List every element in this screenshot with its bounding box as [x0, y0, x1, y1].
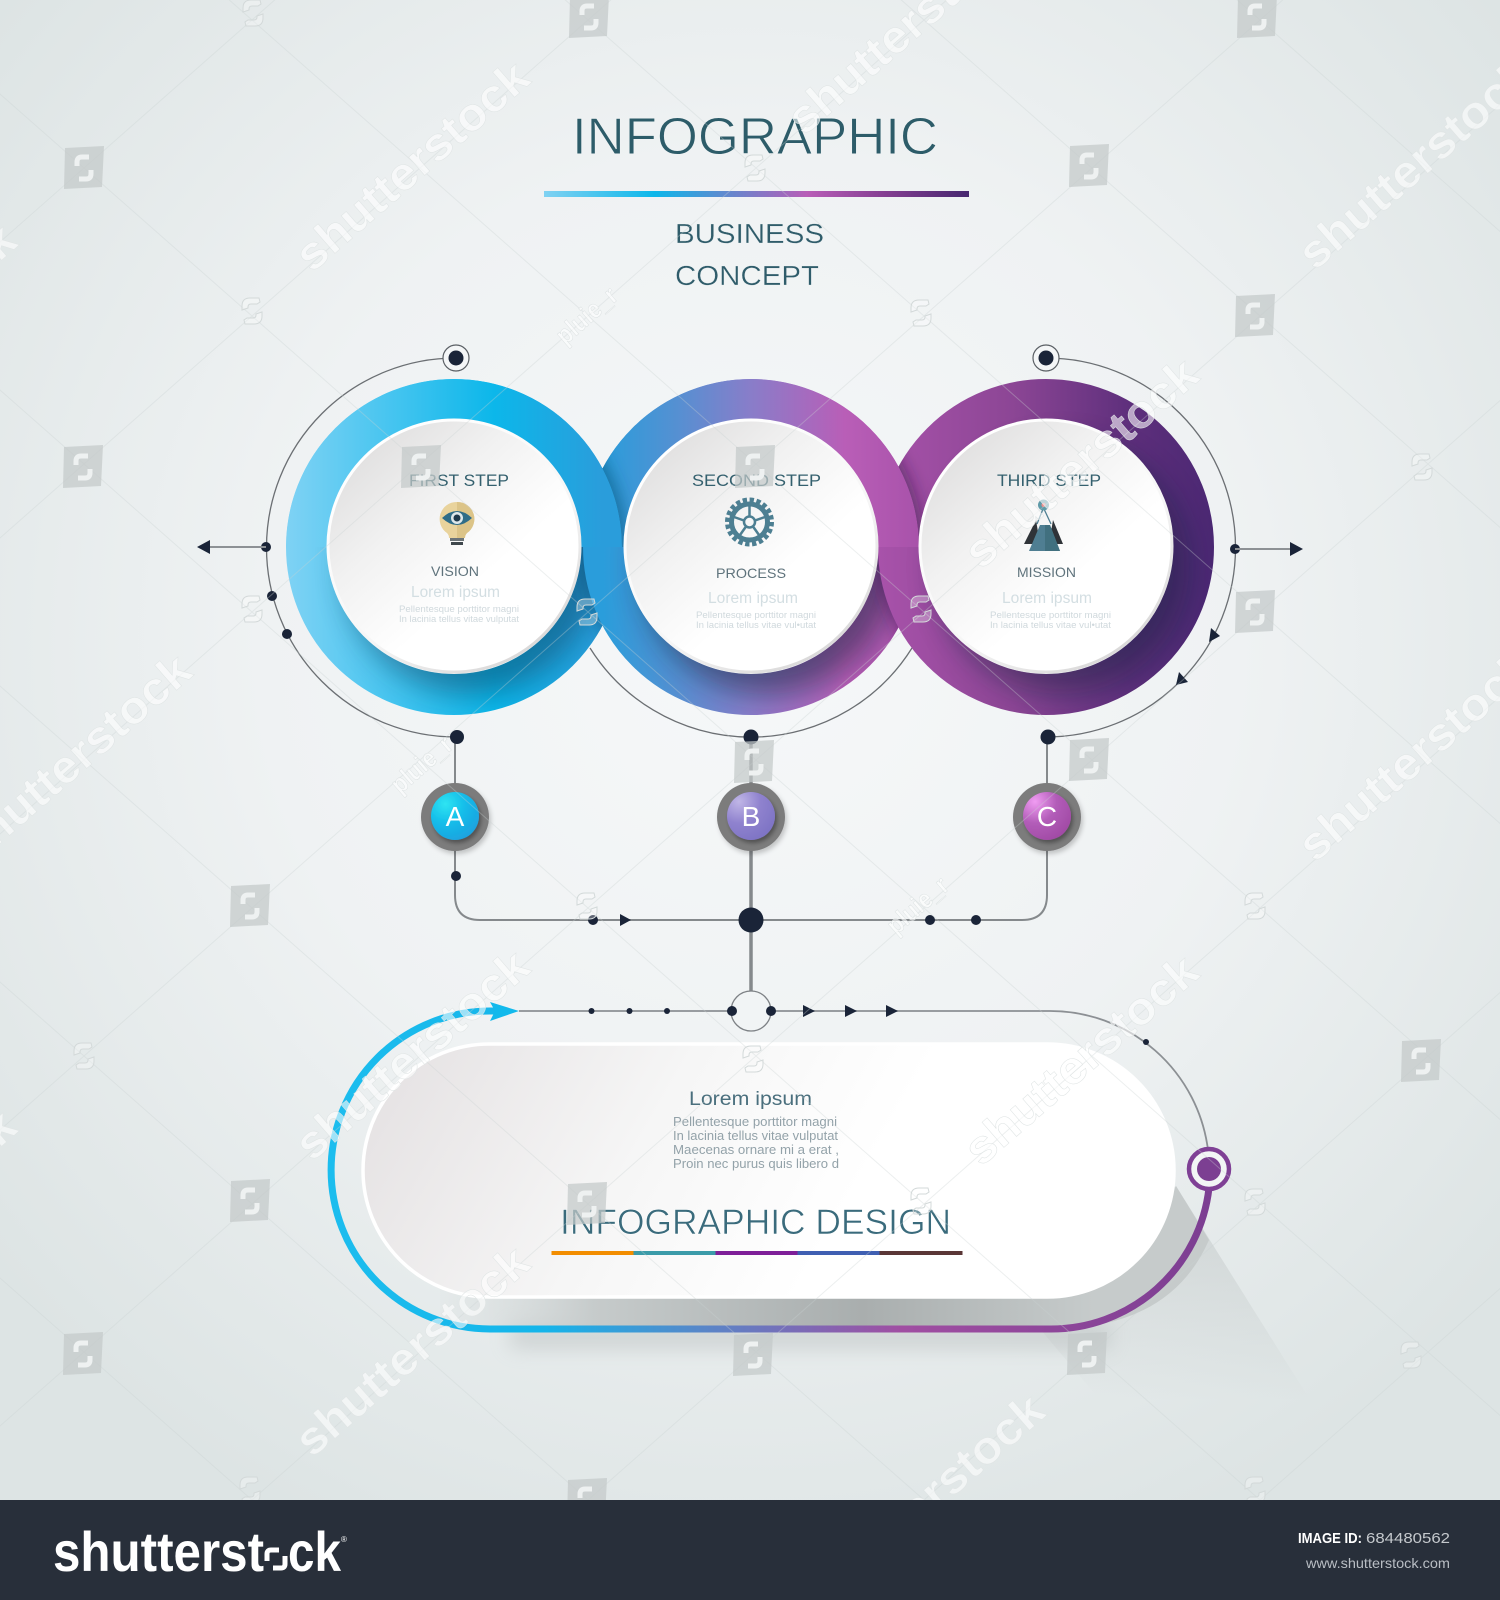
panel: second step [625, 420, 877, 672]
arrow: right [1235, 542, 1303, 556]
ring 1 disc shadow [327, 547, 599, 710]
text: body [990, 610, 1112, 630]
connector network [455, 737, 1047, 992]
badge B: B [742, 801, 760, 832]
multicolor bar [552, 1251, 962, 1255]
arrow: left [197, 540, 266, 554]
text: body: In lacinia tellus vitae vul•utat [696, 620, 817, 630]
watermarks: shutterstock [284, 1235, 539, 1466]
heading: infographic design: INFOGRAPHIC DESIGN [560, 1203, 951, 1242]
subtitle: CONCEPT [675, 260, 819, 291]
connector nodes [451, 871, 981, 932]
title: INFOGRAPHIC [572, 108, 938, 166]
title gradient bar [544, 191, 969, 197]
heading: third step: THIRD STEP [997, 471, 1101, 490]
ring 2 disc shadow [622, 554, 897, 710]
orbit nodes and arrows [261, 345, 1240, 744]
badge C: C [1037, 801, 1057, 832]
watermarks: shutterstock [284, 939, 539, 1170]
ring 1 [306, 400, 602, 694]
junction circle [731, 991, 771, 1031]
ring 2 top overlap over ring 3 [602, 379, 927, 547]
footer logo: shutterst [53, 1520, 264, 1583]
panel: third step [920, 420, 1172, 672]
heading: second step: SECOND STEP [692, 471, 821, 490]
text: lorem ipsum: Lorem ipsum [1002, 590, 1092, 607]
gray top line [519, 1011, 1208, 1150]
pill under shadow [440, 1186, 1209, 1329]
text: body: Pellentesque porttitor magni [673, 1114, 837, 1129]
arrowhead: blue [490, 1002, 519, 1021]
watermarks: shutterstock [953, 347, 1208, 578]
colored outline path [331, 1011, 1209, 1329]
text: lorem ipsum: Lorem ipsum [708, 590, 798, 607]
footer image id [1298, 1530, 1450, 1547]
badge A: A [446, 801, 465, 832]
icon: gear [728, 500, 771, 544]
text: body: In lacinia tellus vitae vul•utat [990, 620, 1112, 630]
ring 3 disc shadow [935, 440, 1189, 694]
pill long shadow [1040, 1186, 1310, 1400]
ring 2 [604, 400, 898, 694]
footer logo: ck [288, 1520, 342, 1583]
text: body: In lacinia tellus vitae vulputat [673, 1128, 838, 1143]
icon: eye light bulb [440, 502, 474, 545]
badge B [717, 783, 785, 851]
text: body [399, 604, 520, 624]
ring 3 [898, 400, 1194, 694]
text: body [696, 610, 817, 630]
text: body: In lacinia tellus vitae vulputat [399, 614, 520, 624]
ring 3 shadow on ring 2 [873, 556, 898, 638]
footer image id: IMAGE ID: [1298, 1530, 1362, 1547]
text: body: Pellentesque porttitor magni [399, 604, 519, 614]
footer image id: 684480562 [1366, 1530, 1450, 1547]
line nodes [588, 1005, 1149, 1045]
text: body: Maecenas ornare mi a erat , [673, 1142, 839, 1157]
footer bar [0, 1500, 1500, 1600]
panel: main pill [363, 1044, 1174, 1297]
subtitle: BUSINESS [675, 218, 824, 249]
footer logo: ® [341, 1535, 347, 1544]
watermarks: pluie_r [549, 280, 623, 350]
badge C [1013, 783, 1081, 851]
icon: mountain peak [1024, 500, 1063, 551]
badge A [421, 783, 489, 851]
thin orbit: ring 1 [266, 358, 456, 737]
footer url: www.shutterstock.com [1305, 1555, 1450, 1571]
purple end node [1189, 1149, 1229, 1189]
subtitle [675, 218, 824, 291]
text: lorem ipsum: Lorem ipsum [689, 1089, 812, 1110]
text: body [673, 1114, 839, 1171]
heading: first step: FIRST STEP [409, 471, 509, 490]
watermarks: shutterstock [284, 50, 539, 281]
watermarks: pluie_r [880, 870, 954, 940]
watermarks: pluie_r [384, 729, 458, 799]
thin orbit: ring 3 [1046, 358, 1236, 737]
label: process: PROCESS [716, 565, 786, 581]
thin orbit: ring 2 [590, 648, 912, 737]
text: lorem ipsum: Lorem ipsum [411, 584, 500, 601]
text: body: Pellentesque porttitor magni [696, 610, 816, 620]
watermarks: shutterstock [953, 944, 1208, 1175]
label: vision: VISION [431, 563, 479, 579]
ring 2 shadow on ring 1 [578, 547, 602, 636]
panel: first step [328, 420, 580, 672]
text: body: Proin nec purus quis libero d [673, 1156, 839, 1171]
ring 1 top overlap over ring 2 [286, 379, 630, 547]
text: body: Pellentesque porttitor magni [990, 610, 1111, 620]
pill lower soft shadow [510, 1326, 1110, 1348]
label: mission: MISSION [1017, 564, 1076, 580]
